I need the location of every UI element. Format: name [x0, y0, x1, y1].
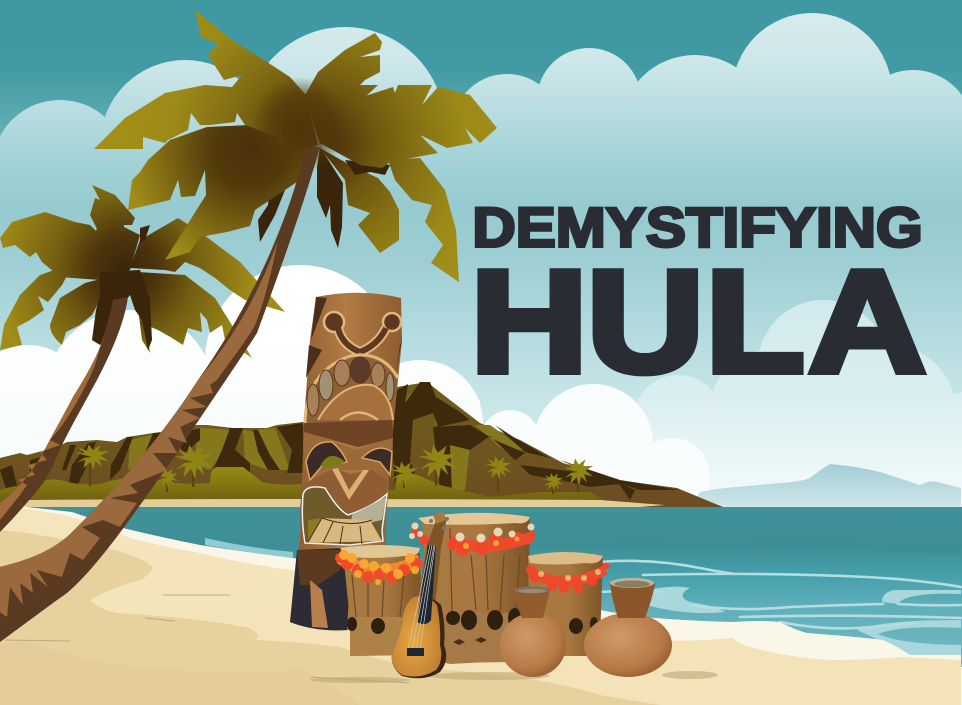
clay pot: small: [500, 586, 566, 677]
small palm trunk: [0, 297, 128, 532]
title: [471, 196, 926, 403]
hill palm: [418, 445, 456, 486]
light wave lines: [600, 561, 961, 628]
tiki statue: [290, 293, 402, 630]
tiki headband with teeth: [305, 355, 398, 425]
ridge shadows: [0, 382, 680, 500]
far shore sand: [0, 499, 665, 508]
large palm top-left leaf: [195, 10, 318, 150]
front clouds: [0, 265, 962, 514]
title line two: HULA: [471, 241, 926, 403]
tiki brow band: [304, 420, 393, 447]
sand deeper shade: [0, 640, 360, 705]
large palm top-right leaf: [305, 33, 382, 145]
small palm hanging leaves: [92, 225, 152, 350]
title line one: DEMYSTIFYING: [472, 196, 923, 259]
drum: center: [418, 513, 530, 664]
hill palm: [75, 444, 109, 486]
large palm tree: [0, 10, 497, 642]
foam edge: [0, 504, 961, 680]
flower lei: right drum: [526, 562, 610, 593]
base vegetation: [0, 467, 605, 502]
flower lei: left drum: [335, 550, 423, 585]
hill palm: [174, 445, 212, 487]
pale cloud bank: [620, 300, 962, 510]
back clouds: [0, 13, 962, 520]
hill palm: [563, 458, 593, 492]
white cloud bank left: [0, 265, 483, 510]
hill palm: [156, 468, 178, 492]
sand shadow: [0, 530, 660, 705]
hill palm: [390, 461, 418, 488]
sand shadows under objects: [310, 671, 718, 683]
ukulele body: [392, 596, 446, 678]
tiki nose and face: [300, 468, 387, 546]
clay pot: large: [584, 578, 672, 677]
dark swells: [600, 538, 961, 555]
ukulele neck: [414, 517, 447, 625]
sand beach: [0, 505, 961, 705]
white cloud bank centre: [470, 384, 710, 514]
tiki lower wrap and legs: [290, 548, 350, 630]
tiki brow swirls: [324, 312, 401, 352]
large palm trunk: [0, 147, 320, 642]
large palm right leaf: [320, 85, 497, 168]
sand ripples: [5, 595, 410, 683]
small palm tree: [0, 185, 285, 532]
Diamond Head ridge: [0, 382, 723, 507]
drum: right: [528, 552, 603, 656]
hill palm: [485, 456, 511, 492]
left shallow water: [205, 538, 293, 558]
sky background: [0, 0, 962, 520]
distant mountains: [690, 464, 961, 508]
tiki body: [290, 293, 402, 630]
hill palm: [543, 473, 563, 494]
drum: left: [340, 545, 422, 656]
flower lei: center drum: [409, 522, 536, 556]
ukulele fretboard: [417, 545, 436, 624]
tiki eyes: [306, 442, 392, 480]
large palm crown centre: [252, 77, 348, 173]
large palm back leaves: [320, 148, 459, 282]
tiki dark side pattern: [306, 297, 402, 378]
small palms on hill: [75, 444, 593, 494]
large palm left lower leaf: [128, 125, 318, 260]
light wave blobs: [640, 587, 961, 655]
ukulele strings and bridge: [408, 545, 435, 650]
ocean: [0, 507, 962, 667]
large palm left leaf: [94, 85, 318, 149]
large palm hanging dark leaves: [258, 147, 390, 248]
lit ridge: [128, 384, 525, 490]
tiki mouth: [302, 487, 387, 545]
ukulele: [392, 512, 449, 678]
small palm fronds: [0, 185, 285, 358]
